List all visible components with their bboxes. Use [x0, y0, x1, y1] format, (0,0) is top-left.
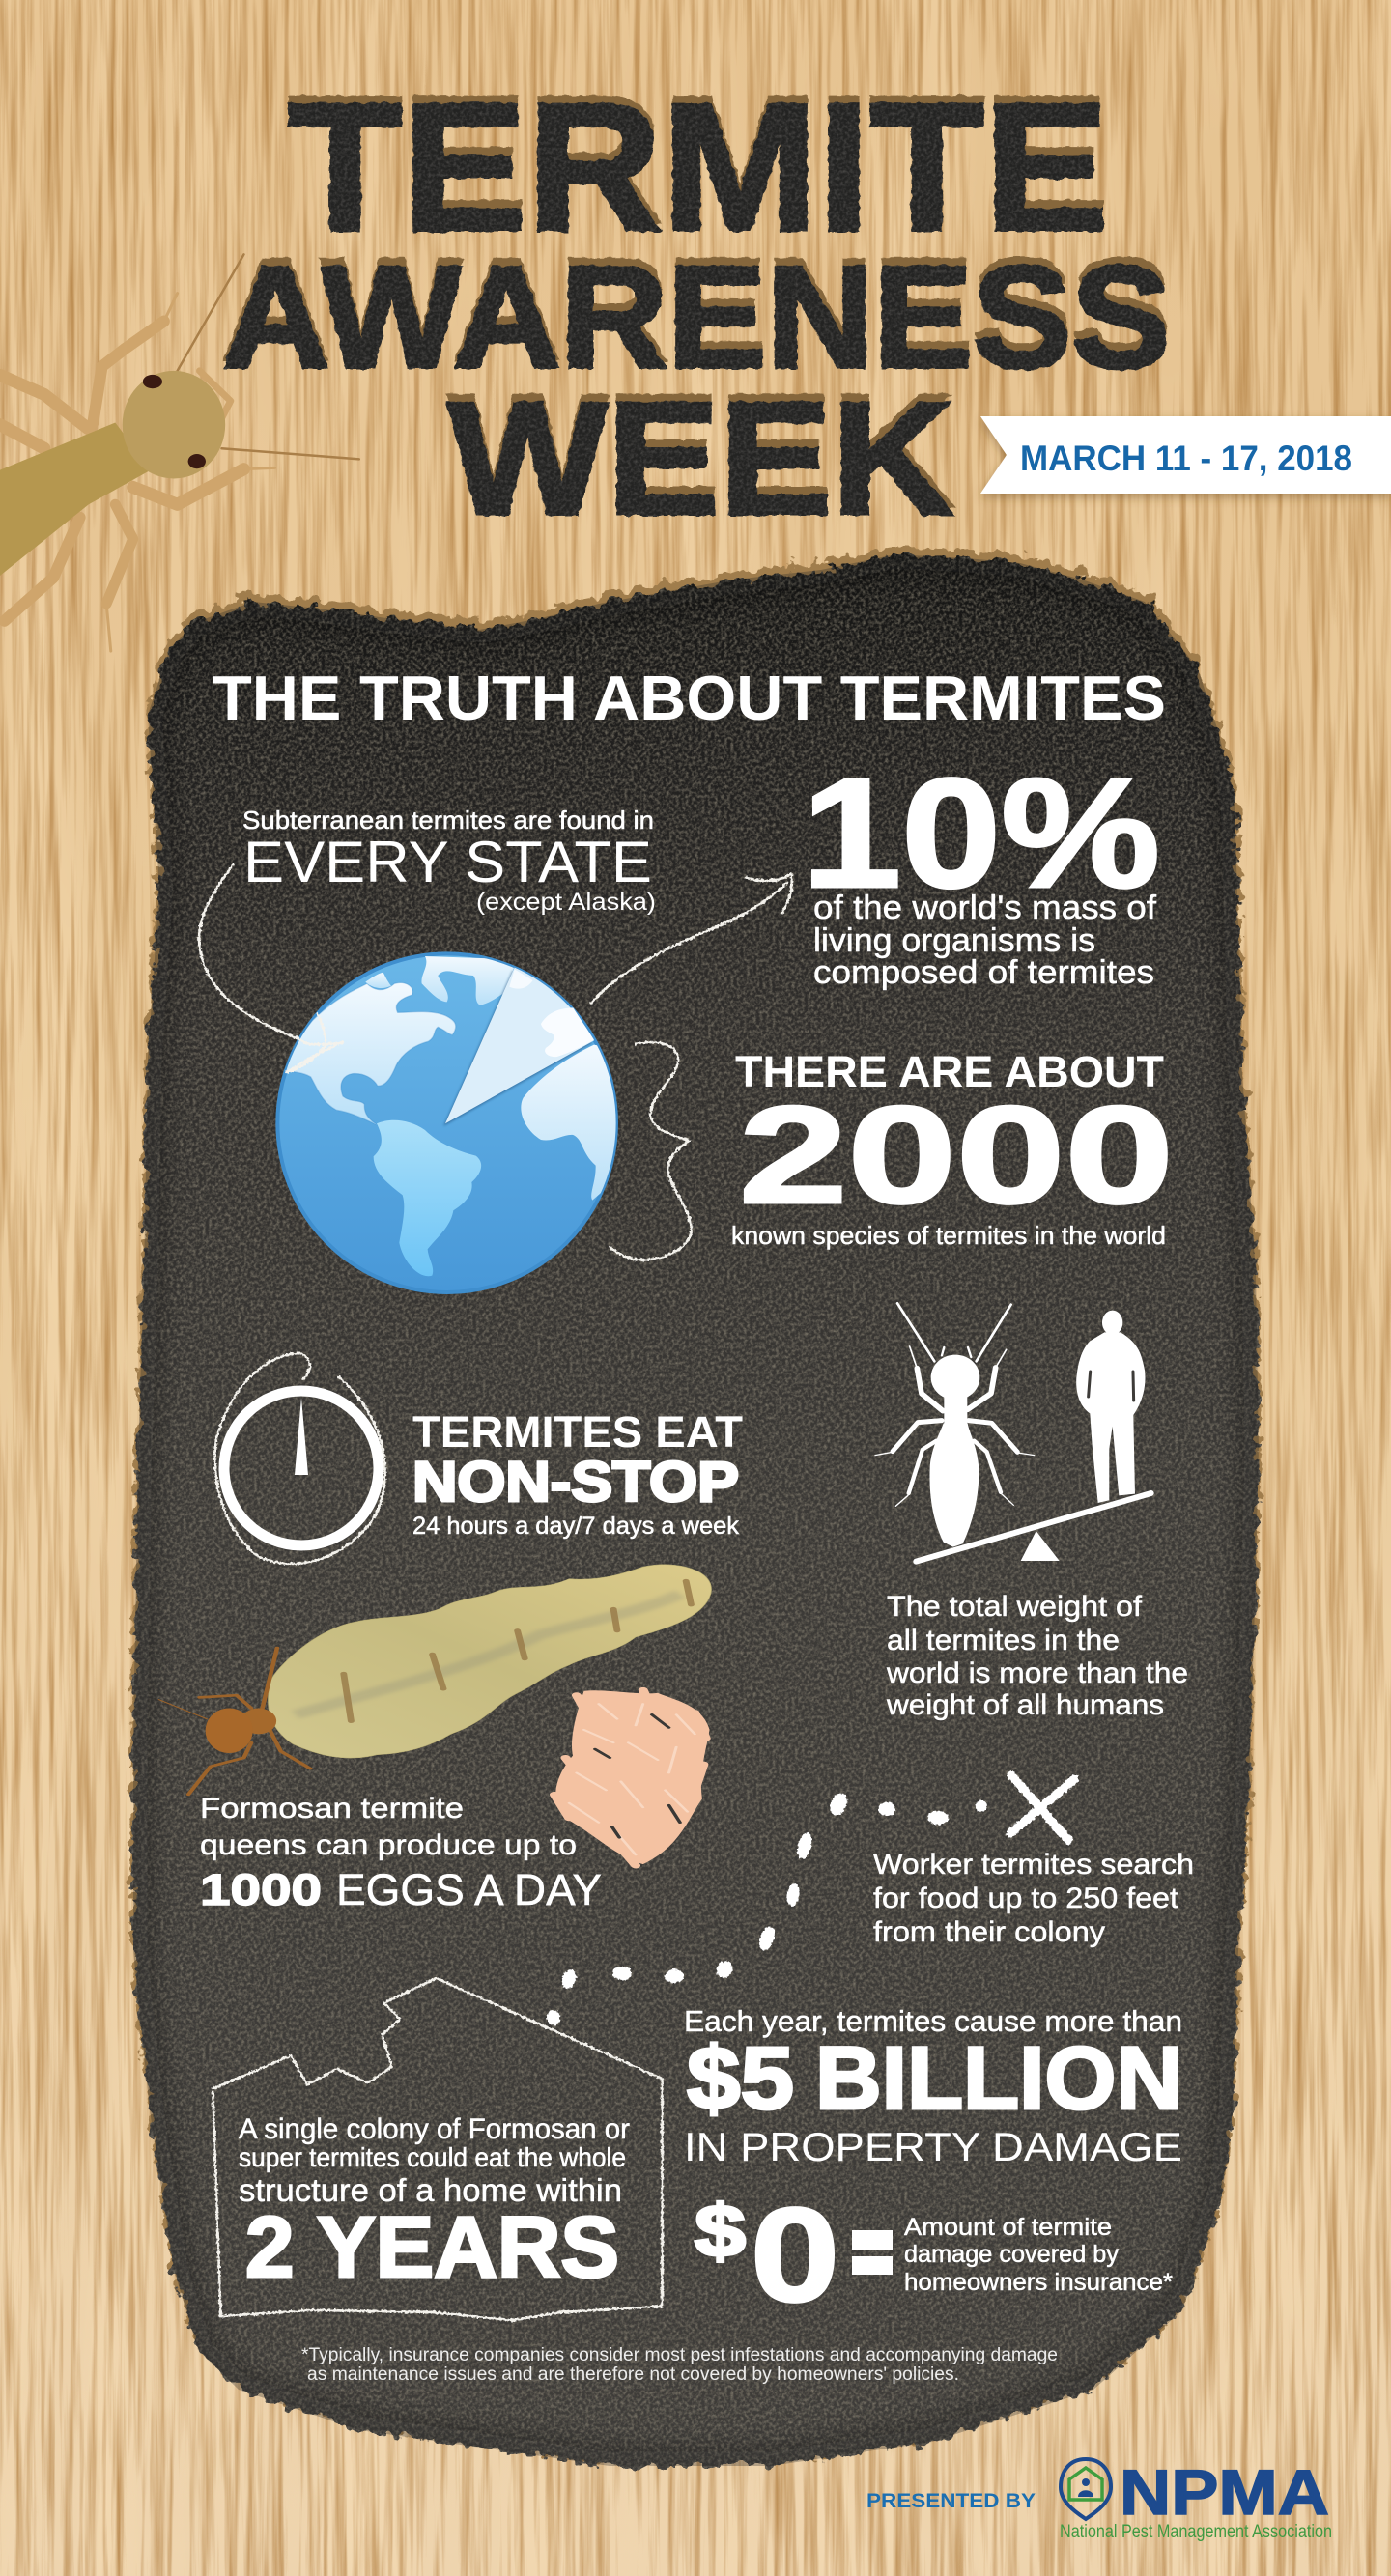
text: single colony: super termites could eat the whole	[239, 2142, 626, 2172]
stat: 10 percent: of the world's mass of	[813, 890, 1157, 926]
queen midline	[296, 1594, 680, 1714]
npma logo: NPMA	[1120, 2456, 1329, 2528]
stat: every state: (except Alaska)	[476, 889, 656, 916]
stat: 2000 species: THERE ARE ABOUT	[735, 1047, 1164, 1096]
text: total weight: world is more than the	[886, 1657, 1188, 1689]
title: carved lettering: WEEK	[448, 362, 953, 541]
pie wedge: 10 percent slice	[445, 968, 594, 1123]
footnote	[301, 2345, 1058, 2385]
ocean	[277, 953, 616, 1292]
footnote: *Typically, insurance companies consider most pest infestations and accompanying damage	[301, 2345, 1058, 2365]
termite eyes	[143, 375, 206, 468]
stat: 10 percent	[802, 747, 1160, 991]
heading: the truth about termites: THE TRUTH ABOUT TERMITES	[213, 663, 1166, 733]
text: single colony	[239, 2113, 630, 2295]
stat: 0 dollars insurance	[695, 2181, 1173, 2330]
chalk dotted trail with x	[547, 1775, 1074, 2025]
text: total weight: weight of all humans	[886, 1689, 1164, 1721]
wedge: greenland	[541, 1007, 594, 1057]
land: island	[365, 973, 391, 988]
land: north atlantic coast	[421, 956, 517, 1005]
text: single colony: 2 YEARS	[245, 2198, 619, 2295]
chalk house outline	[213, 1978, 663, 2320]
land: africa	[521, 1045, 621, 1201]
chalk arrow: globe to 10 percent	[591, 873, 792, 1003]
chalk arrow: every state to globe	[199, 865, 310, 1044]
title: carved lettering: WEEK	[448, 370, 953, 549]
text: single colony: A single colony of Formosan or	[239, 2113, 630, 2145]
text: formosan queens: queens can produce up to	[200, 1829, 577, 1861]
text: worker termites: for food up to 250 feet	[873, 1882, 1179, 1914]
stat: termites eat non-stop: NON-STOP	[412, 1451, 739, 1514]
stat: 5 billion damage: $5	[687, 2029, 794, 2128]
stat: 10 percent: 10%	[802, 747, 1160, 920]
egg highlights and gaps	[554, 1690, 706, 1865]
termite body	[0, 422, 151, 576]
text: formosan queens: Formosan termite	[200, 1793, 464, 1825]
text: formosan queens	[200, 1793, 602, 1914]
text: single colony: structure of a home within	[239, 2172, 622, 2208]
queen segment stripes	[344, 1581, 691, 1721]
stat: 10 percent: living organisms is	[813, 922, 1095, 959]
stat: termites eat non-stop	[412, 1407, 743, 1540]
clock icon	[215, 1353, 385, 1564]
npma logo: National Pest Management Association	[1060, 2522, 1332, 2542]
text: worker termites: Worker termites search	[873, 1849, 1194, 1881]
icon: termite and human on scale	[875, 1303, 1151, 1562]
presented by label: PRESENTED BY	[866, 2490, 1036, 2512]
seesaw	[916, 1493, 1151, 1562]
text: total weight: all termites in the	[887, 1625, 1120, 1656]
shield icon	[1061, 2459, 1111, 2519]
stat: 5 billion damage: Each year, termites cause more than	[684, 2004, 1182, 2038]
text: worker termites: from their colony	[873, 1916, 1105, 1948]
stat: every state	[242, 806, 656, 916]
stat: 2000 species: 2000	[739, 1079, 1174, 1232]
stat: 0 dollars insurance: homeowners insurance*	[904, 2269, 1173, 2296]
text: total weight: The total weight of	[887, 1591, 1143, 1623]
footnote: as maintenance issues and are therefore not covered by homeowners' policies.	[307, 2364, 959, 2385]
stat: 5 billion damage	[684, 2004, 1182, 2169]
text: formosan queens: 1000	[200, 1865, 322, 1914]
human silhouette	[1076, 1311, 1145, 1503]
title: carved lettering: TERMITE	[288, 66, 1109, 269]
stat: 0 dollars insurance: $	[695, 2191, 746, 2273]
stat: termites eat non-stop: TERMITES EAT	[412, 1407, 743, 1457]
wedge: iceland	[509, 969, 533, 989]
stat: every state: EVERY STATE	[243, 830, 652, 894]
text: total weight	[886, 1591, 1188, 1721]
queen termite illustration	[158, 1565, 711, 1795]
stat: 10 percent: composed of termites	[813, 954, 1154, 991]
title: carved lettering: TERMITE	[288, 58, 1109, 261]
stat: 5 billion damage: BILLION	[815, 2029, 1182, 2128]
title: carved lettering	[222, 58, 1171, 549]
eggs pile	[554, 1690, 710, 1865]
queen abdomen	[268, 1565, 711, 1758]
termite silhouette	[875, 1303, 1035, 1547]
title: carved lettering: AWARENESS	[222, 236, 1171, 398]
stat: termites eat non-stop: 24 hours a day/7 days a week	[412, 1513, 740, 1540]
land: south america	[374, 1120, 481, 1276]
queen head and legs	[158, 1648, 310, 1795]
wedge shadow	[443, 970, 592, 1126]
termite illustration at left edge	[0, 254, 359, 651]
stat: 0 dollars insurance: damage covered by	[904, 2241, 1119, 2268]
land: north america	[285, 982, 456, 1125]
text: worker termites	[873, 1849, 1194, 1948]
stat: 2000 species	[731, 1047, 1174, 1250]
stat: 0 dollars insurance: 0	[751, 2181, 839, 2330]
termite legs and antennae	[0, 254, 359, 651]
stat: 0 dollars insurance: Amount of termite	[904, 2214, 1112, 2241]
termite head	[123, 371, 225, 479]
chalk star mark on globe	[287, 1013, 343, 1072]
title: carved lettering: AWARENESS	[222, 228, 1171, 390]
date banner	[980, 416, 1391, 494]
globe	[277, 953, 621, 1292]
npma logo	[1060, 2456, 1332, 2542]
stat: 5 billion damage: IN PROPERTY DAMAGE	[684, 2124, 1182, 2169]
chalk brace: globe to species	[610, 1042, 692, 1260]
text: formosan queens: EGGS A DAY	[336, 1865, 602, 1914]
stat: 2000 species: known species of termites in the world	[731, 1221, 1166, 1250]
panel: dark burrowed area	[133, 549, 1259, 2466]
stat: every state: Subterranean termites are found in	[242, 806, 654, 835]
date banner: MARCH 11 - 17, 2018	[1020, 439, 1352, 478]
